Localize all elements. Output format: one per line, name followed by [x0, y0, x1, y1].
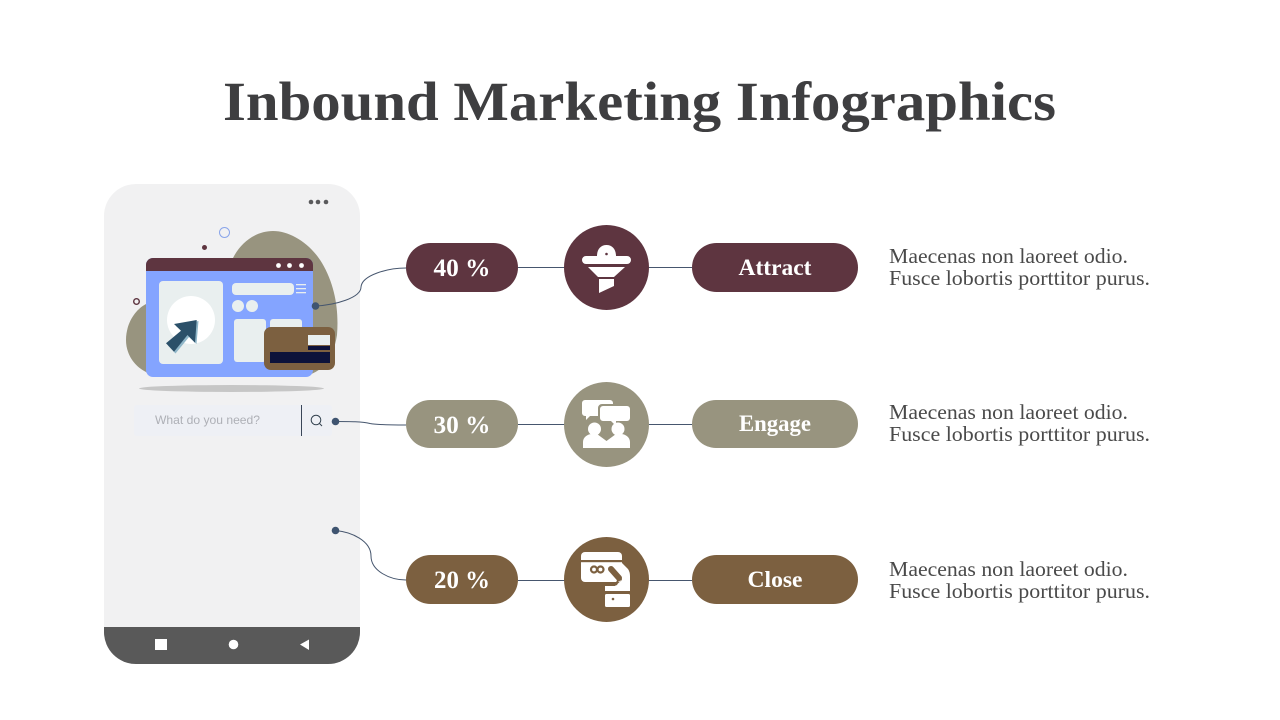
percent pill: 20: [406, 555, 518, 604]
icon: people chatting: [564, 382, 649, 467]
label pill: engage: [692, 400, 858, 448]
percent pill: 40: [406, 243, 518, 292]
percent pill: 30: [406, 400, 518, 448]
text: attract description: Maecenas non laoreet odio.: [889, 244, 1128, 268]
icon: hand holding card: [564, 537, 649, 622]
text: close description: [889, 557, 1150, 603]
icon: funnel: [564, 225, 649, 310]
text: engage description: Maecenas non laoreet odio.: [889, 400, 1128, 424]
panel: phone mockup: [104, 184, 360, 664]
percent pill: 40: 40 %: [434, 255, 490, 282]
percent pill: 20: 20 %: [434, 567, 490, 594]
text: engage description: Fusce lobortis porttitor purus.: [889, 422, 1150, 446]
connector: attract: [312, 268, 406, 310]
connector: engage: [332, 418, 406, 425]
label pill: close: [692, 555, 858, 604]
row: close: [406, 537, 1150, 622]
label pill: close: Close: [748, 567, 802, 592]
text: attract description: [889, 244, 1150, 290]
illustration: marketing browser window: [126, 228, 337, 392]
row: attract: [406, 225, 1150, 310]
percent pill: 30: 30 %: [434, 412, 490, 439]
text: attract description: Fusce lobortis porttitor purus.: [889, 266, 1150, 290]
connector: close: [332, 527, 406, 580]
search bar: [134, 405, 332, 436]
text: engage description: [889, 400, 1150, 446]
label pill: attract: Attract: [738, 255, 812, 280]
title: Inbound Marketing Infographics: [223, 71, 1056, 132]
row: engage: [406, 382, 1150, 467]
text: close description: Maecenas non laoreet odio.: [889, 557, 1128, 581]
search bar: What do you need?: [155, 413, 260, 427]
text: close description: Fusce lobortis porttitor purus.: [889, 579, 1150, 603]
label pill: attract: [692, 243, 858, 292]
label pill: engage: Engage: [739, 411, 811, 436]
